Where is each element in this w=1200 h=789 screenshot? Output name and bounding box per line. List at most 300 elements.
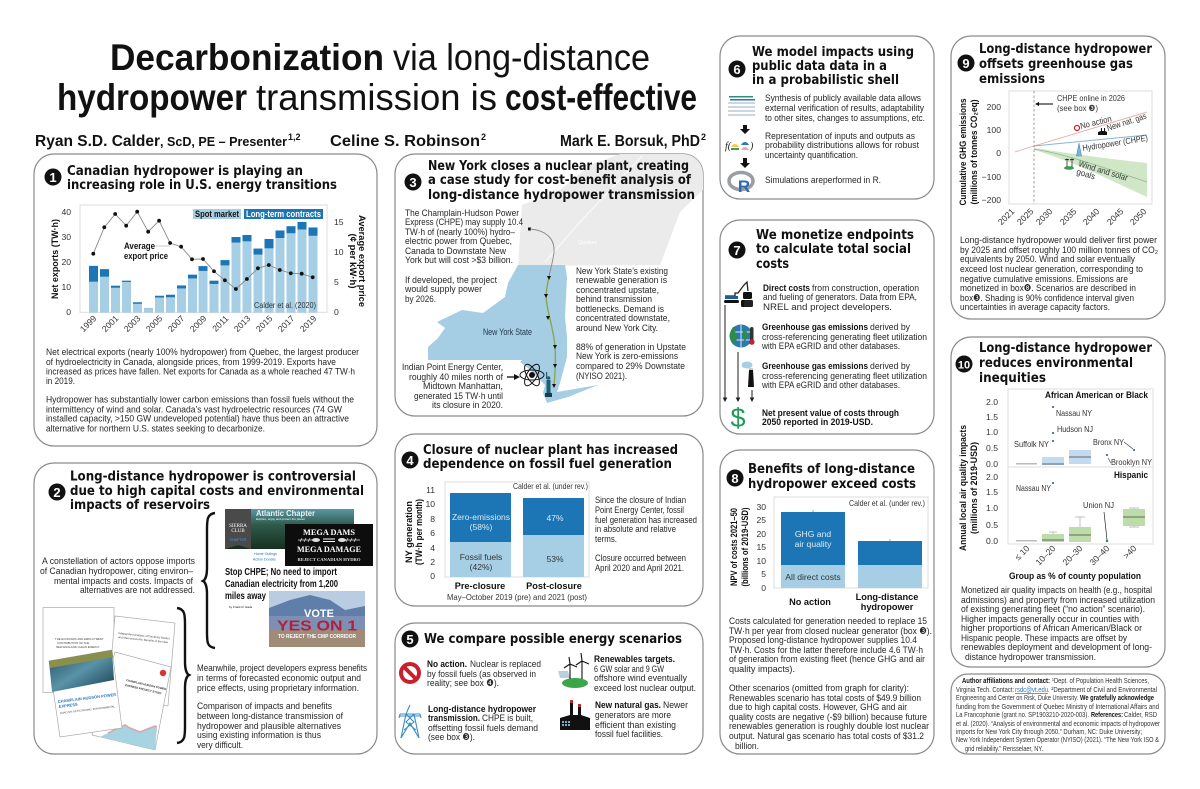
- text: developers: between long-distance transmission of: [197, 711, 343, 722]
- chart: net exports and average export price: 2019: [298, 313, 319, 334]
- text block 1: in 2019.: [46, 376, 75, 387]
- heading 9: Long-distance hydropower: [979, 42, 1153, 57]
- text block 10: higher proportions of African American/Black or: [961, 623, 1143, 634]
- arrowhead: [514, 374, 520, 380]
- text block 8: TW·h per year from closed nuclear generator (box ❸).: [729, 626, 932, 637]
- chart: NY generation: 8: [430, 514, 435, 524]
- text: long-distance hydropower: CHPE is built,: [482, 713, 533, 724]
- text block 10: of existing generating fleet (“no action” scenario).: [961, 604, 1145, 615]
- chart: NPV of costs: 25: [756, 515, 766, 525]
- authors: 2: [481, 132, 486, 142]
- image: Vote Yes on 1 sign: TO REJECT THE CMP CORRIDOR: [278, 634, 356, 640]
- chart: NPV of costs: [729, 497, 928, 612]
- icon: transmission tower: [399, 705, 421, 738]
- text: long-distance hydropower: offsetting fossil fuels demand: [428, 723, 538, 734]
- icon: no action: [401, 664, 419, 682]
- chart: NPV of costs: No action: [789, 597, 831, 607]
- chart: NY generation: May–October 2019 (pre) and 2021 (post): [447, 592, 587, 602]
- number badge 4: 4: [406, 453, 414, 468]
- text block 1: installed capacity, >150 GW undeveloped potential) have thus been an attractive: [46, 414, 349, 425]
- text: CHPE: by 2026.: [405, 294, 436, 305]
- image: project developer reports: Independent Analysis of Electricity Market: [118, 631, 170, 640]
- text: renewables: 6 GW solar and 9 GW: [594, 664, 665, 675]
- text block 6: Representation of inputs and outputs as: [765, 131, 915, 142]
- image: Sierra Club banner: SIERRA: [229, 524, 247, 529]
- chart: Hispanic: Union NJ: [1083, 500, 1114, 510]
- text: greenhouse gas emissions, second entry: Greenhouse gas emissions: [762, 361, 868, 372]
- text: developers: Comparison of impacts and benefits: [197, 701, 332, 712]
- text: developers: hydropower and plausible alternatives: [197, 721, 341, 732]
- image: project developer reports: CHAMPLAIN HUDSON POWER: [58, 692, 116, 704]
- text block 1: increased as prices have fallen. Net exports for Canada as a whole reached 47 TW·h: [46, 367, 355, 378]
- text: developers: in terms of forecasted economic output and: [197, 673, 361, 684]
- image: Vote Yes on 1 sign: [269, 591, 365, 647]
- transmission line: [528, 228, 557, 388]
- text: greenhouse gas emissions: [761, 322, 927, 352]
- text: no action: by fossil fuels (as observed in: [427, 669, 536, 680]
- number badge 6: 6: [733, 62, 741, 77]
- text: existing generation: (NYISO 2021).: [576, 371, 627, 382]
- text: Indian Point: its closure in 2020.: [432, 400, 503, 411]
- chart: net exports and average export price: (¢ per kW·h): [348, 234, 358, 288]
- text: opponents: of Canadian hydropower, citing environ–: [40, 566, 194, 577]
- title: cost-effective: [505, 77, 697, 118]
- text: Indian Point: [402, 362, 503, 411]
- chart: net exports and average export price: 2009: [188, 313, 209, 334]
- text block 1: [46, 347, 360, 435]
- panel 5: scenarios: [395, 623, 703, 754]
- heading 9: [979, 42, 1153, 87]
- image: Mega Dams poster: REJECT CANADIAN HYDRO: [298, 557, 361, 562]
- image: Vote Yes on 1 sign: VOTE: [304, 608, 334, 620]
- heading 2: Long-distance hydropower is controversial: [70, 470, 356, 485]
- chart: cumulative GHG emissions: −100: [982, 172, 1001, 182]
- chart: Hispanic: >40: [1121, 543, 1139, 561]
- text: CHPE: [404, 208, 524, 305]
- text block 8: Costs calculated for generation needed to replace 15: [729, 616, 927, 627]
- panel 7: monetize: [720, 220, 934, 434]
- heading 1: Canadian hydropower is playing an: [67, 164, 303, 179]
- image: project developer reports: NEW ENGLAND CLEAN ENERGY: [56, 645, 100, 649]
- chart: African American or Black: Hudson NJ: [1057, 424, 1093, 434]
- icon: atom: [520, 362, 544, 388]
- image: Sierra Club banner: Home Outings: [254, 552, 277, 556]
- text block 4: [595, 495, 697, 574]
- text block 8: quality impacts).: [729, 664, 795, 675]
- affiliations text: We gratefully acknowledge: [1080, 693, 1154, 702]
- heading 6: [752, 45, 914, 88]
- number badge 9: [958, 54, 974, 72]
- chart: net exports and average export price: 2003: [122, 313, 143, 334]
- heading 8: hydropower exceed costs: [748, 477, 916, 492]
- text block 10: Monetized air quality impacts on health (e.g., hospital: [961, 585, 1152, 596]
- authors: Celine S. Robinson: [330, 133, 480, 150]
- text: renewables: offshore wind eventually: [594, 673, 687, 684]
- text: Indian Point: roughly 40 miles north of: [409, 372, 503, 383]
- chart: net exports and average export price: Net exports (TW·h): [50, 219, 60, 299]
- image: project developer reports: EXPRESS: [59, 702, 78, 709]
- chart: NPV of costs: NPV of costs 2021–50: [729, 508, 739, 586]
- arrow down 1: [740, 125, 750, 134]
- text block 8: Proposed long-distance hydropower supplies 10.4: [729, 635, 918, 646]
- text: no action: [427, 659, 541, 689]
- text block 6: uncertainty quantification.: [765, 150, 858, 161]
- panel 4: closure of nuclear plant: [395, 434, 703, 606]
- chart: net exports and average export price: 2015: [254, 313, 275, 334]
- image: project developer reports: EXPRESS PROJECT STUDY: [125, 683, 162, 695]
- affiliations text: ¹Dept. of Population Health Sciences,: [1052, 676, 1149, 685]
- text: greenhouse gas emissions, second entry: derived by: [870, 361, 910, 372]
- image: project developer reports: CHAMPLAIN HUDSON POWER: [126, 678, 167, 691]
- text: no action: Nuclear is replaced: [470, 659, 541, 670]
- text: existing generation: 88% of generation in Upstate: [576, 342, 686, 353]
- chart: net exports and average export price: Calder et al. (2020): [254, 300, 316, 310]
- number badge 4: [402, 452, 418, 468]
- chart: NPV of costs: 10: [756, 556, 766, 566]
- op-ed headline: by Frank R. Eads: [229, 605, 253, 609]
- text block 1: Net electrical exports (nearly 100% hydropower) from Quebec, the largest producer: [46, 347, 360, 358]
- image: project developer reports: ANALYSIS OF ECONOMIC, ENVIRONMENTAL: [60, 704, 116, 715]
- number badge 5: 5: [406, 632, 414, 647]
- panel 3: New York case study: [395, 154, 705, 416]
- heading 5: We compare possible energy scenarios: [424, 632, 682, 647]
- text: CHPE: The Champlain-Hudson Power: [405, 208, 520, 219]
- text block 9: monetized in box❽. Scenarios are described in: [960, 283, 1136, 294]
- text block 4: Since the closure of Indian: [595, 495, 686, 506]
- text block 1: intermittency of wind and solar. Canada’s vast hydroelectric resources (74 GW: [46, 404, 343, 415]
- y-axis title: [958, 425, 979, 551]
- affiliations text: et al. (2020). “Analysis of environmental and economic impacts of hydropower: [956, 719, 1160, 728]
- text: opponents: mental impacts and costs. Impacts of: [54, 576, 193, 587]
- chart: net exports and average export price: 0: [66, 307, 71, 317]
- op-ed headline: Canadian electricity from 1,200: [225, 578, 338, 590]
- heading 2: [70, 470, 364, 513]
- icon: data table: [728, 96, 755, 116]
- number badge 8: [726, 470, 744, 486]
- chart: cumulative GHG emissions: 200: [987, 102, 1001, 112]
- affiliations text: . ²Department of Civil and Environmental: [1048, 685, 1157, 694]
- chart: cumulative GHG emissions: (see box ❸): [1057, 103, 1098, 113]
- text: Indian Point: generated 15 TW·h until: [414, 391, 503, 402]
- text block 1: alternative for northern U.S. states seeking to decarbonize.: [46, 424, 265, 435]
- heading 6: We model impacts using: [752, 45, 914, 60]
- heading 4: Closure of nuclear plant has increased: [423, 443, 678, 458]
- chart: cumulative GHG emissions: Cumulative GHG emissions: [958, 98, 968, 206]
- text block 4: Closure occurred between: [595, 553, 686, 564]
- affiliations text: funding from the Government of Quebec Ministry of International Affairs and: [956, 702, 1159, 711]
- chart: NPV of costs: Calder et al. (under rev.): [849, 498, 925, 508]
- chart: cumulative GHG emissions: New nat. gas: [1106, 111, 1148, 133]
- affiliations text: Calder, RSD: [1124, 710, 1157, 719]
- affiliations text: rsdc@vt.edu: [1015, 685, 1048, 694]
- text: CHPE: TW·h of (nearly 100%) hydro–: [405, 227, 516, 238]
- heading 3: long-distance hydropower transmission: [428, 188, 695, 203]
- text: natural gas: New natural gas.: [595, 700, 661, 711]
- text: renewables: exceed lost nuclear output.: [594, 683, 696, 694]
- chart: cumulative GHG emissions: Hydropower (CHPE): [1082, 133, 1149, 153]
- text block 9: uncertainties in average capacity factors.: [960, 302, 1110, 313]
- chart: African American or Black: Brooklyn NY: [1111, 457, 1152, 467]
- chart: Hispanic: 0.0: [986, 536, 998, 546]
- chart: African American or Black: Suffolk NY: [1014, 439, 1049, 449]
- text block 8: renewables generation is roughly double lost nuclear: [729, 721, 930, 732]
- text block 8: output. Natural gas scenario has total costs of $31.2: [729, 731, 924, 742]
- image: Sierra Club banner: [225, 509, 354, 562]
- chart: net exports and average export price: 30: [61, 232, 71, 242]
- chart: NY generation: Fossil fuels: [460, 552, 502, 562]
- text: direct costs: from construction, operation: [812, 283, 919, 294]
- chart: African American or Black: 0.5: [986, 443, 998, 453]
- heading 8: [748, 462, 916, 492]
- image: Sierra Club banner: Action Donate: [253, 558, 276, 562]
- heading 10: reduces environmental: [979, 356, 1133, 371]
- chart: NY generation: Post-closure: [526, 581, 582, 591]
- text: net present value: [762, 408, 899, 428]
- text: opponents: [40, 556, 195, 596]
- heading 3: [428, 159, 695, 203]
- text block 8: [729, 616, 932, 752]
- chart: cumulative GHG emissions: 2021: [996, 206, 1017, 227]
- heading 9: offsets greenhouse gas: [979, 57, 1133, 72]
- text: direct costs: [763, 283, 919, 313]
- text: long-distance hydropower: Long-distance hydropower: [428, 704, 536, 715]
- chart: net exports and average export price: 10: [61, 282, 71, 292]
- heading 7: costs: [756, 257, 789, 272]
- text: long-distance hydropower: [428, 704, 538, 743]
- heading 10: Long-distance hydropower: [979, 341, 1153, 356]
- text: CHPE: If developed, the project: [405, 275, 497, 286]
- number badge 7: 7: [733, 243, 741, 258]
- chart: cumulative GHG emissions: 2030: [1034, 206, 1055, 227]
- chart: NY generation: 53%: [546, 554, 564, 564]
- chart: NY generation: (58%): [470, 522, 492, 532]
- chart: net exports and average export price: Average export price: [357, 215, 367, 307]
- text: direct costs: and fueling of generators. Data from EPA,: [763, 292, 917, 303]
- chart: NPV of costs: 15: [756, 542, 766, 552]
- chart: Hispanic: [986, 467, 1153, 581]
- panel 9: greenhouse gas: [951, 36, 1165, 319]
- icon: renewables: [558, 653, 589, 688]
- text: greenhouse gas emissions, second entry: with EPA eGRID and other databases.: [761, 380, 900, 391]
- text: existing generation: around New York City.: [576, 323, 658, 334]
- chart: African American or Black: 1.5: [986, 412, 998, 422]
- text block 6: Simulations areperformed in R.: [765, 175, 881, 186]
- chart: net exports and average export price: 2011: [210, 313, 231, 333]
- chart: cumulative GHG emissions: 2050: [1128, 206, 1149, 227]
- chart: net exports and average export price: 1999: [78, 313, 99, 334]
- text block 4: in absolute and relative: [595, 524, 676, 535]
- affiliations text: Engineering and Center on Risk, Duke University.: [956, 693, 1078, 702]
- y-axis title: (millions of 2019-USD): [969, 442, 979, 534]
- heading 1: increasing role in U.S. energy transitions: [67, 178, 337, 193]
- chart: NY generation: (42%): [470, 562, 492, 572]
- text block 1: Hydropower has substantially lower carbon emissions than fossil fuels without the: [46, 395, 354, 406]
- text: direct costs: NREL and project developers.: [763, 302, 892, 313]
- text: natural gas: [595, 700, 689, 740]
- icon: probability function: f(: [725, 141, 732, 152]
- authors: , ScD, PE – Presenter: [160, 134, 287, 149]
- text: CHPE: electric power from Quebec,: [405, 236, 512, 247]
- authors: 1,2: [288, 132, 301, 142]
- heading 2: due to high capital costs and environmental: [70, 484, 364, 499]
- heading 9: emissions: [979, 72, 1045, 87]
- chart: Hispanic: 10–20: [1033, 543, 1058, 567]
- chart: NY generation: 47%: [546, 513, 564, 523]
- number badge 6: [728, 60, 746, 78]
- chart: NPV of costs: (billions of 2019-USD): [740, 508, 750, 586]
- text: existing generation: bottlenecks. Demand is: [576, 304, 664, 315]
- op-ed headline: Stop CHPE; No need to import: [225, 566, 337, 578]
- text: existing generation: concentrated upstate,: [576, 285, 659, 296]
- image: Mega Dams poster: [285, 524, 373, 566]
- chart: net exports and average export price: [50, 205, 367, 334]
- text: opponents: A constellation of actors oppose imports: [42, 556, 195, 567]
- panel 10: environmental inequities: [951, 337, 1165, 667]
- text block 1: of hydroelectricity in Canada, alongside prices, from 1999-2019. Exports have: [46, 357, 336, 368]
- text: natural gas: fossil fuel facilities.: [595, 729, 663, 740]
- text: Indian Point: Midtown Manhattan,: [423, 381, 503, 392]
- chart: cumulative GHG emissions: (millions of tonnes CO₂eq): [969, 100, 979, 204]
- heading 7: [756, 228, 914, 272]
- heading 4: dependence on fossil fuel generation: [423, 457, 672, 472]
- image: project developer reports: [43, 608, 175, 750]
- image: Sierra Club banner: Atlantic Chapter: [256, 509, 315, 518]
- heading 10: [979, 341, 1153, 386]
- chart: NY generation: Zero-emissions: [452, 512, 510, 522]
- title: Decarbonization: [110, 37, 384, 78]
- text: existing generation: behind transmission: [576, 294, 652, 305]
- text block 6: Synthesis of publicly available data allows: [765, 93, 921, 104]
- chart: African American or Black: Nassau NY: [1056, 408, 1092, 418]
- image: project developer reports: THE ECONOMIC AND EMPLOYMENT: [55, 637, 104, 641]
- text: CHPE: Express (CHPE) may supply 10.4: [405, 217, 524, 228]
- text: greenhouse gas emissions: cross-referencing generating fleet utilization: [762, 332, 927, 343]
- chart: Hispanic: 0.5: [986, 520, 998, 530]
- heading 7: We monetize endpoints: [756, 228, 914, 243]
- text: renewables: [594, 654, 696, 694]
- affiliations text: [956, 676, 1160, 753]
- heading 6: in a probabilistic shell: [752, 73, 899, 88]
- chart: African American or Black: [986, 389, 1153, 469]
- icon: probability function: [725, 141, 754, 152]
- text block 8: quality costs are negative (-$9 billion) because future: [729, 712, 927, 723]
- number badge 1: 1: [49, 170, 57, 185]
- chart: NPV of costs: hydropower: [861, 602, 914, 612]
- text: Indian Point: Indian Point Energy Center,: [402, 362, 503, 373]
- text block 6: [765, 93, 925, 186]
- text block 9: equivalents by 2050. Wind and solar eventually: [960, 254, 1135, 265]
- text block 10: renewables deployment and development of long-: [961, 642, 1152, 653]
- text block 4: fuel generation has increased: [595, 515, 697, 526]
- map: Quebec and New York State: Quebec: [578, 240, 598, 246]
- chart: Hispanic: Group as % of county population: [1009, 571, 1141, 581]
- icon: cloud and smokestack: [742, 362, 754, 387]
- chart: NY generation: Pre-closure: [455, 581, 505, 591]
- chart: cumulative GHG emissions: 2040: [1081, 206, 1102, 227]
- text block 9: exceed lost nuclear generation, corresponding to: [960, 264, 1143, 275]
- op-ed headline: [225, 566, 338, 609]
- chart: net exports and average export price: 0: [334, 307, 339, 317]
- title: [57, 37, 697, 118]
- text: greenhouse gas emissions, second entry: [761, 361, 927, 391]
- text block 9: box❸. Shading is 90% confidence interval given: [960, 293, 1134, 304]
- chart: NY generation: 0: [430, 571, 435, 581]
- image: Vote Yes on 1 sign: YES ON 1: [277, 618, 357, 634]
- text: greenhouse gas emissions, second entry: cross-referencing generating fleet utilization: [762, 371, 927, 382]
- affiliations text: Virginia Tech. Contact:: [956, 685, 1014, 694]
- heading 4: [423, 443, 678, 472]
- number badge 1: [44, 168, 62, 186]
- chart: net exports and average export price: Spot market: [195, 209, 239, 219]
- heading 3: New York closes a nuclear plant, creating: [428, 159, 689, 174]
- chart: cumulative GHG emissions: goals: [1075, 166, 1097, 181]
- text block 10: Higher impacts generally occur in counties with: [961, 614, 1139, 625]
- title: hydropower: [57, 77, 247, 118]
- heading 10: inequities: [979, 371, 1046, 386]
- connector lines to dollar: [724, 305, 754, 401]
- number badge 2: [48, 484, 66, 500]
- number badge 7: [728, 242, 746, 258]
- chart: net exports and average export price: 2005: [144, 313, 165, 334]
- text: existing generation: New York is zero-emissions: [576, 351, 678, 362]
- chart: net exports and average export price: Long-term contracts: [246, 209, 321, 219]
- chart: NPV of costs: 20: [756, 529, 766, 539]
- chart: net exports and average export price: 2017: [276, 313, 297, 334]
- text block 4: April 2020 and April 2021.: [595, 563, 684, 574]
- chart: African American or Black: Bronx NY: [1093, 437, 1124, 447]
- image: Mega Dams poster: MEGA DAMS: [303, 528, 356, 537]
- chart: NPV of costs: Long-distance: [856, 592, 918, 602]
- text: long-distance hydropower: (see box ❸).: [428, 732, 475, 743]
- text block 8: Renewables scenario has total costs of $49.9 billion: [729, 693, 921, 704]
- number badge 10: [956, 356, 972, 372]
- title: via long-distance: [393, 37, 650, 78]
- label: New York State: New York State: [483, 327, 532, 337]
- chart: net exports and average export price: export price: [124, 251, 168, 261]
- affiliations text: grid reliability.” Rensselaer, NY.: [965, 744, 1043, 753]
- text: greenhouse gas emissions: Greenhouse gas emissions: [762, 322, 868, 333]
- text block 8: Other scenarios (omitted from graph for clarity):: [729, 683, 909, 694]
- number badge 5: [402, 630, 418, 648]
- text: existing generation: concentrated downstate,: [576, 313, 670, 324]
- text: greenhouse gas emissions: derived by: [870, 322, 910, 333]
- chart: net exports and average export price: 2013: [232, 313, 253, 334]
- text: renewables: Renewables targets.: [594, 654, 675, 665]
- text: natural gas: generators are more: [595, 710, 671, 721]
- chart: net exports and average export price: 20: [61, 257, 71, 267]
- text block 4: Point Energy Center, fossil: [595, 505, 684, 516]
- icon: natural gas plant: [560, 700, 590, 730]
- heading 7: to calculate total social: [756, 242, 911, 257]
- arrow to plant: [507, 376, 515, 378]
- text: no action: reality; see box ❹).: [427, 678, 499, 689]
- chart: cumulative GHG emissions: −200: [982, 195, 1001, 205]
- chart: cumulative GHG emissions: [958, 91, 1152, 227]
- chart: NY generation: 10: [425, 499, 435, 509]
- chart: NY generation: [404, 481, 589, 602]
- panel 8: benefits exceed costs: [720, 450, 934, 754]
- chart: Hispanic: 30–40: [1087, 543, 1112, 567]
- chart: Hispanic: 1.5: [986, 487, 998, 497]
- chart: cumulative GHG emissions: No action: [1079, 113, 1113, 131]
- text: CHPE: York but will cost >$3 billion.: [405, 255, 513, 266]
- op-ed headline: miles away: [225, 590, 266, 602]
- text: CHPE: would supply power: [404, 284, 483, 295]
- chart: NPV of costs: 0: [761, 583, 766, 593]
- affiliations text: Author affiliations and contact:: [962, 676, 1050, 685]
- text block 4: terms.: [595, 534, 617, 545]
- affiliations text: imports for New York City through 2050.” Durham, NC: Duke University;: [956, 727, 1142, 736]
